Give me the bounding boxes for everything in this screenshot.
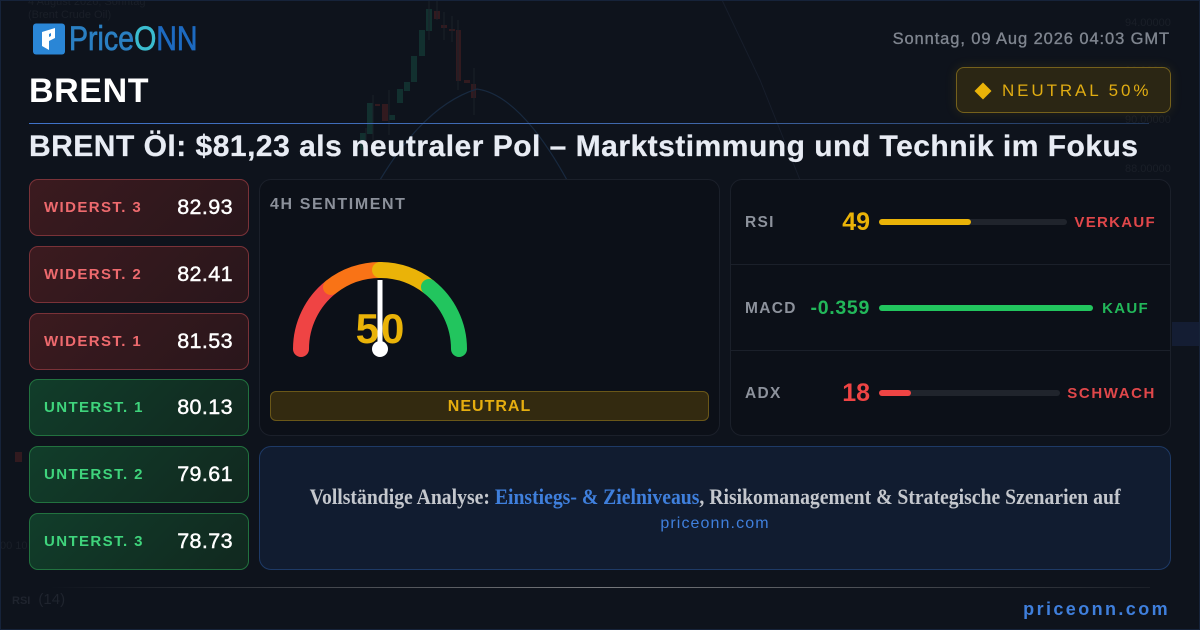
row: MACD [731,265,1170,351]
resistance level 3 [29,179,249,236]
support level 3: UNTERST. 3 [44,533,144,550]
neutral status bar [270,391,709,421]
panel: 4H sentiment gauge [259,179,720,436]
icon: diamond [975,83,991,99]
support level 2 [29,446,249,503]
row: MACD: KAUF [1102,300,1149,316]
row: RSI: RSI [745,214,775,230]
headline: BRENT Öl: $81,23 als neutraler Pol – Marktstimmung und Technik im Fokus [29,130,1138,163]
icon: logo mark [33,24,65,54]
row: RSI [731,180,1170,265]
footer brand link: priceonn.com [1023,599,1170,619]
gauge needle [372,280,388,357]
neutral status bar: NEUTRAL [448,398,531,415]
support level 3: 78.73 [177,529,233,553]
support level 1: UNTERST. 1 [44,399,144,416]
call to action text: Vollständige Analyse: Einstiegs- & Zielniveaus, Risikomanagement & Strategische Szenarien auf [310,484,1120,509]
logo wordmark: PriceONN [69,20,198,58]
background: faint candlestick chart: 92.00000 [1125,65,1171,77]
row: ADX: 18 [842,379,870,407]
support level 3 [29,513,249,570]
resistance level 2: WIDERST. 2 [44,266,142,283]
row: ADX [745,379,1156,407]
resistance level 3: WIDERST. 3 [44,199,142,216]
resistance level 2 [29,246,249,303]
resistance level 3: 82.93 [177,195,233,219]
resistance level 1: 81.53 [177,329,233,353]
row: ADX: SCHWACH [1067,385,1156,402]
symbol heading: BRENT [29,72,149,110]
background: faint candlestick chart: 88.00000 [1125,163,1171,175]
panel heading: 4H SENTIMENT [270,196,407,213]
support level 1 [29,379,249,436]
gauge value: 50 [356,305,406,352]
gauge [293,262,467,357]
support level 2: 79.61 [177,462,233,486]
row: MACD: MACD [745,300,797,316]
background: faint candlestick chart: 94.00000 [1125,17,1171,29]
background: faint candlestick chart: (Brent Crude Oil) [28,9,111,21]
background: faint candlestick chart: 90.00000 [1125,114,1171,126]
date and time: Sonntag, 09 Aug 2026 04:03 GMT [893,30,1170,48]
support level 2: UNTERST. 2 [44,466,144,483]
row: RSI: VERKAUF [1074,214,1156,230]
logo: PriceONN [33,20,198,58]
panel: indicators [730,179,1171,436]
badge text: NEUTRAL 50% [1002,81,1151,100]
background: faint candlestick chart: 00 10 [0,540,28,552]
call to action link: priceonn.com [660,515,770,532]
row: ADX: ADX [745,385,782,402]
row: RSI: 49 [842,208,870,236]
resistance level 2: 82.41 [177,262,233,286]
resistance level 1: WIDERST. 1 [44,333,142,350]
support level 1: 80.13 [177,395,233,419]
chart label: RSI: RSI (14) [12,591,65,608]
header divider [29,123,1149,124]
row: MACD: -0.359 [810,297,870,319]
sentiment badge [956,67,1171,113]
resistance level 1 [29,313,249,370]
panel: call to action [259,446,1171,570]
footer divider [50,587,1150,588]
